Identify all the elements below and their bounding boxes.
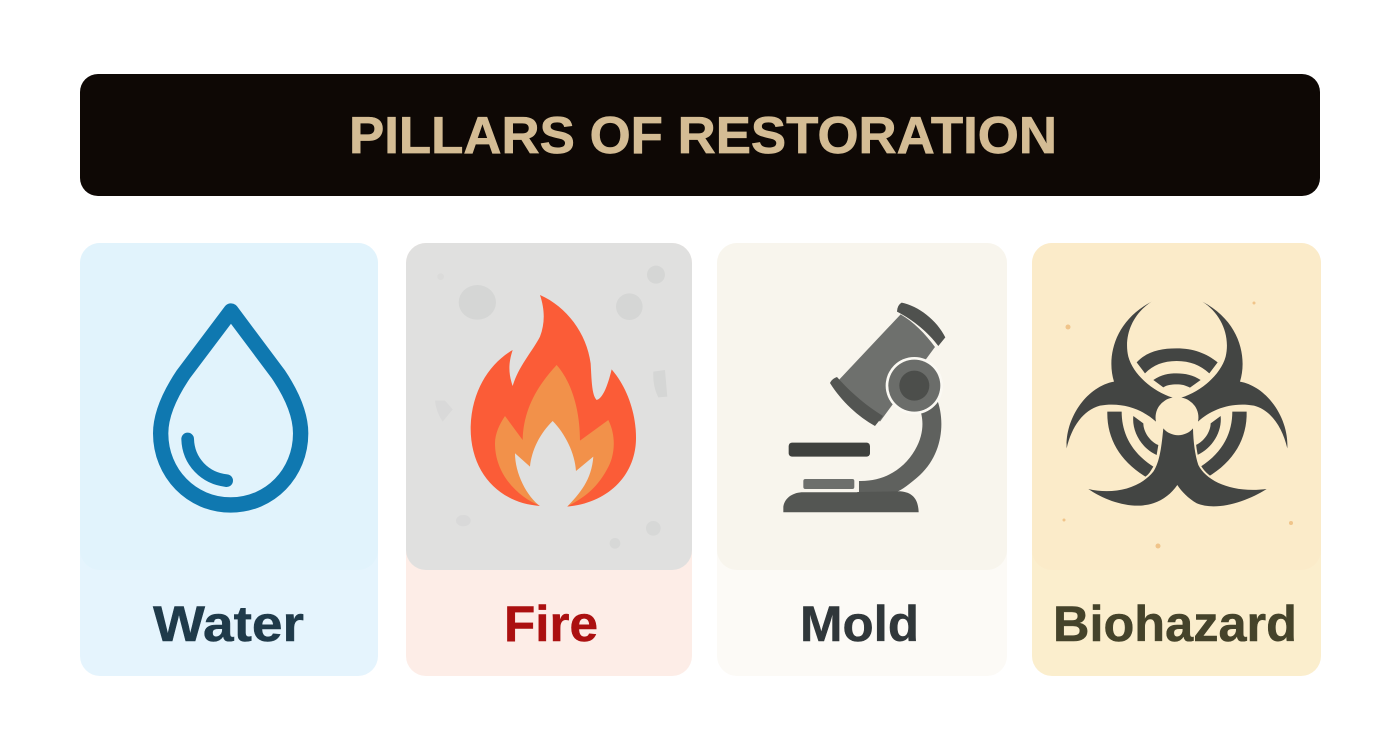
title: PILLARS OF RESTORATION <box>349 107 1057 165</box>
panel: biohazard <box>1032 243 1321 676</box>
icon: biohazard symbol <box>1067 302 1287 506</box>
panel: mold <box>717 243 1007 676</box>
icon: flame <box>471 295 636 507</box>
panel: fire <box>406 243 692 676</box>
title banner <box>80 74 1320 196</box>
dust speckles <box>1062 302 1293 548</box>
label: mold: Mold <box>800 596 919 652</box>
label: biohazard: Biohazard <box>1053 596 1297 652</box>
icon: water drop <box>161 311 301 505</box>
label: water: Water <box>153 596 304 652</box>
icon: microscope <box>783 303 945 512</box>
ash speckles <box>435 266 667 549</box>
panel: water <box>80 243 378 676</box>
label: fire: Fire <box>504 596 598 652</box>
